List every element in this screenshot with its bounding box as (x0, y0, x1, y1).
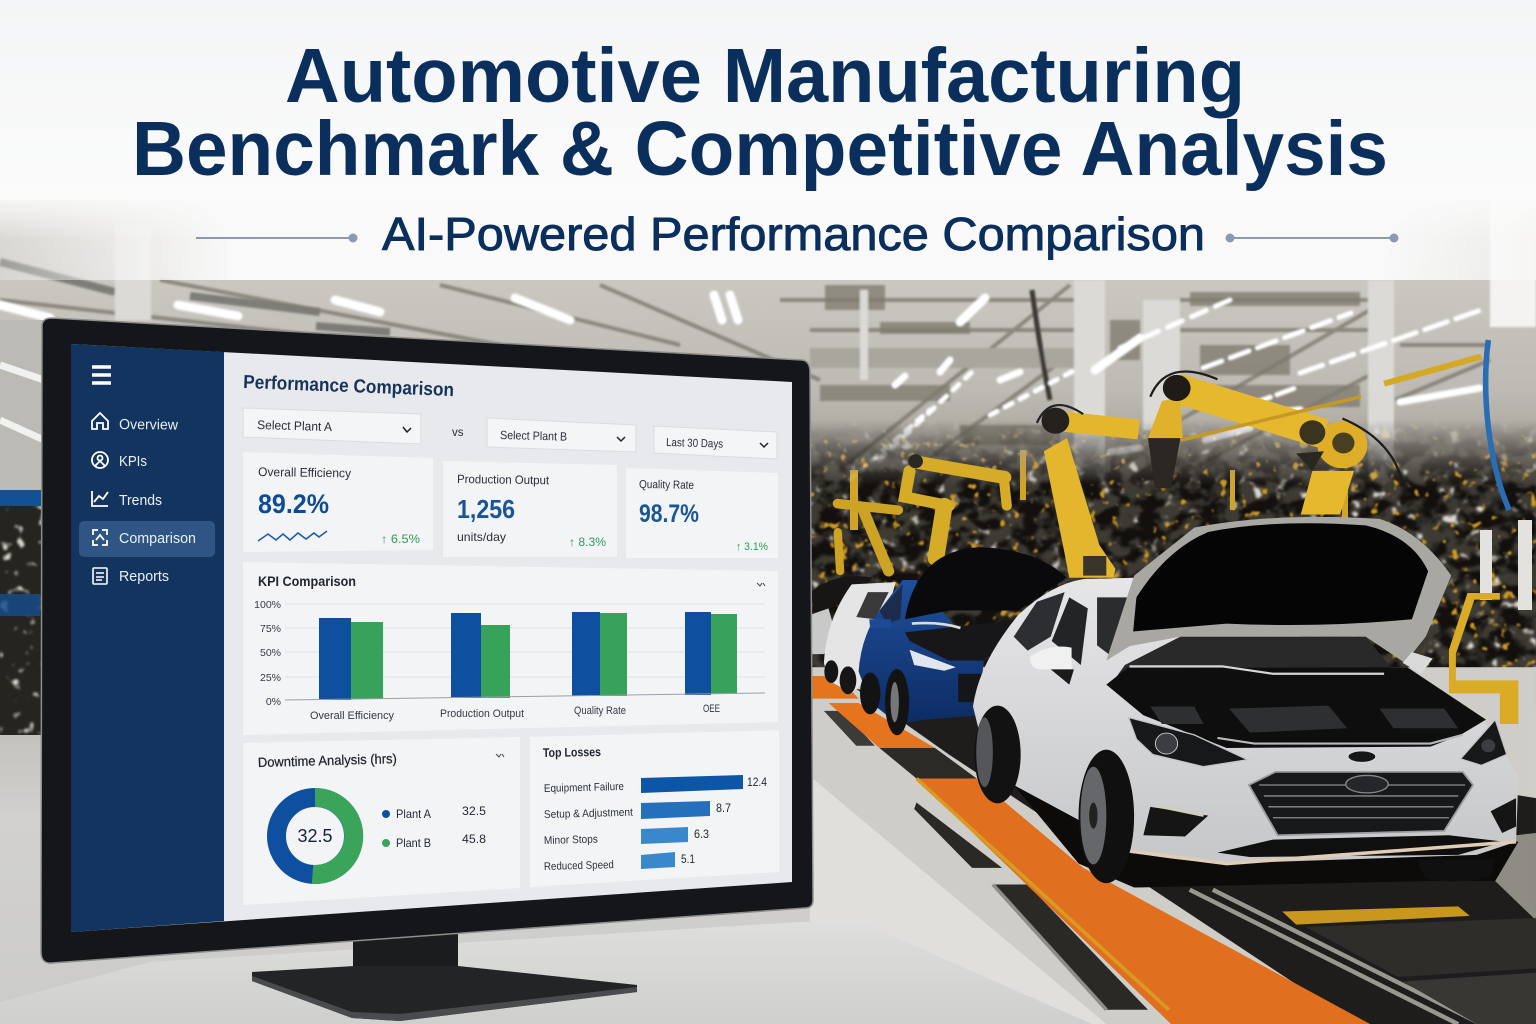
headlights (1129, 717, 1248, 767)
machinery band behind cars (811, 422, 1536, 668)
screen background (71, 344, 792, 932)
distant cars (810, 576, 896, 694)
grille (1249, 772, 1473, 835)
panel: top losses: Top Losses (543, 745, 601, 760)
panel: top losses: 5.1 (681, 852, 695, 866)
dropdown: date range: Last 30 Days (666, 437, 723, 451)
left background machinery (0, 320, 44, 736)
wheels (974, 706, 1021, 803)
KPI card: quality rate (626, 468, 778, 558)
donut chart (276, 797, 354, 874)
panel: top losses: 8.7 (716, 801, 731, 815)
KPI card: production output: 1,256 (457, 494, 515, 524)
ceiling lights (0, 295, 1481, 490)
subtitle: AI-Powered Performance Comparison (382, 208, 1205, 260)
panel: KPI comparison bar chart: Overall Efficiency (310, 710, 394, 722)
dropdown: date range (654, 426, 777, 459)
panel: downtime analysis: Downtime Analysis (hrs) (258, 751, 397, 770)
legend: 32.5 (462, 804, 486, 818)
panel: KPI comparison bar chart: 75% (260, 623, 281, 635)
KPI card: overall efficiency: Overall Efficiency (258, 465, 352, 480)
table surface (0, 922, 1092, 1024)
KPI card: production output (443, 461, 617, 557)
icon: home (92, 413, 108, 429)
factory floor and conveyor (810, 667, 1536, 1024)
sidebar menu labels: Comparison (119, 531, 196, 547)
sidebar menu labels: KPIs (119, 454, 147, 470)
heading: performance comparison: Performance Comparison (243, 372, 454, 401)
white fade over ceiling (0, 190, 1536, 280)
robot 4 (838, 504, 898, 571)
yellow frame at right (1449, 593, 1518, 724)
floor behind monitor (0, 735, 830, 1024)
KPI card: quality rate: Quality Rate (639, 479, 694, 492)
sidebar menu labels: Trends (119, 493, 162, 509)
robot 3 (905, 462, 1007, 558)
orange floor stripes (812, 676, 1370, 1024)
panel: KPI comparison bar chart: 50% (260, 647, 281, 659)
KPI card: quality rate: 98.7% (639, 500, 699, 528)
sidebar (71, 344, 224, 932)
raised hood (1106, 517, 1451, 663)
KPI card: overall efficiency (243, 452, 433, 552)
KPI card: quality rate: ↑ 3.1% (736, 541, 768, 553)
sidebar menu labels: Overview (119, 417, 179, 434)
fog lights and lower intake (1143, 807, 1208, 837)
vs label: vs (452, 427, 464, 439)
icon: menu (92, 367, 111, 383)
legend: Plant A (396, 807, 431, 821)
KPI card: overall efficiency: ↑ 6.5% (381, 532, 420, 546)
windshield (1116, 637, 1398, 678)
engine bay (1106, 667, 1486, 748)
selected item highlight (79, 521, 215, 557)
icon: trends (92, 491, 108, 506)
dropdown: plant A: Select Plant A (257, 418, 333, 434)
ceiling trusses and beams (0, 200, 1536, 510)
subtitle left rule (196, 234, 357, 242)
icon: comparison (93, 530, 107, 545)
icon: KPIs (92, 452, 108, 468)
panel: top losses: Setup & Adjustment (544, 807, 633, 821)
panel: KPI comparison bar chart: 0% (266, 696, 281, 708)
KPI card: production output: ↑ 8.3% (569, 537, 606, 549)
robot 2 (1044, 438, 1116, 578)
KPI card: production output: units/day (457, 530, 506, 544)
panel: top losses: Minor Stops (544, 834, 599, 847)
icon: reports (93, 568, 107, 584)
sidebar menu labels (119, 417, 196, 585)
dropdown: plant B (487, 418, 636, 452)
panel: top losses: Reduced Speed (544, 859, 614, 873)
panel: downtime analysis (243, 737, 520, 905)
factory ceiling background (0, 0, 1536, 520)
legend (382, 804, 486, 850)
robot 1 (1301, 471, 1354, 515)
panel: KPI comparison bar chart (243, 562, 778, 735)
dropdown: plant B: Select Plant B (500, 428, 567, 444)
legend: Plant B (396, 836, 431, 850)
panel: KPI comparison bar chart: Quality Rate (574, 705, 626, 717)
monitor bezel (41, 318, 813, 963)
panel: top losses: 6.3 (694, 827, 709, 841)
blue car (859, 547, 1067, 735)
panel: KPI comparison bar chart: KPI Comparison (258, 574, 356, 589)
monitor stand (252, 925, 637, 1021)
donut chart: 32.5 (297, 826, 333, 846)
panel: top losses: 12.4 (747, 775, 767, 789)
factory columns (115, 225, 1394, 510)
panel: top losses: Equipment Failure (544, 781, 624, 795)
panel: top losses (530, 730, 779, 887)
legend: 45.8 (462, 832, 486, 846)
panel: KPI comparison bar chart: Production Output (440, 708, 524, 720)
dropdown: plant A (243, 408, 421, 444)
title (132, 33, 1388, 192)
white car (824, 582, 896, 693)
KPI card: production output: Production Output (457, 472, 550, 487)
main white car (973, 517, 1518, 888)
panel: KPI comparison bar chart: 100% (254, 599, 281, 611)
yellow robot arms (838, 340, 1518, 724)
sidebar menu labels: Reports (119, 569, 169, 585)
title: Automotive Manufacturing (285, 33, 1245, 119)
blue hose (1486, 340, 1509, 510)
title: Benchmark & Competitive Analysis (132, 106, 1388, 192)
KPI card: overall efficiency: 89.2% (258, 489, 329, 519)
panel: KPI comparison bar chart: 25% (260, 672, 281, 684)
panel: KPI comparison bar chart: OEE (703, 703, 720, 715)
subtitle right rule (1226, 234, 1398, 242)
